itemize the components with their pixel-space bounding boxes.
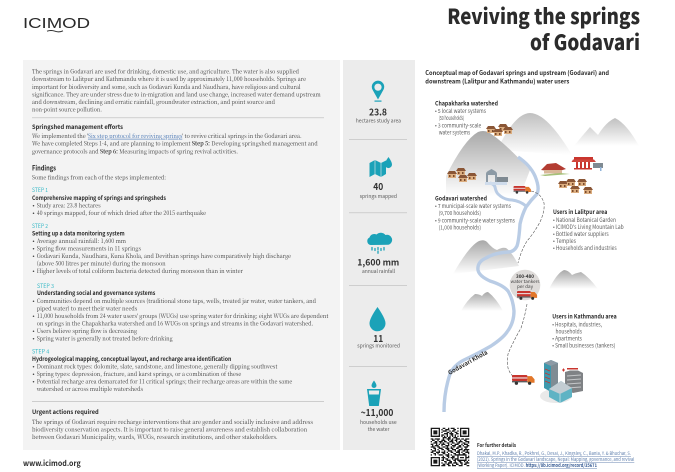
section: urgent actions required: between Godavari Municipality, wards, WUGs, research institutions, and other stakeholders. — [32, 432, 278, 441]
section: springshed management efforts: Springshed management efforts — [32, 122, 123, 131]
step 3: STEP 3 — [37, 282, 54, 290]
stat: households: the water — [368, 426, 390, 433]
QR code — [431, 428, 469, 466]
stat: springs mapped: springs mapped — [360, 193, 397, 200]
section: findings intro: Findings — [32, 164, 56, 174]
section: findings intro: Some findings from each of the steps implemented: — [32, 172, 166, 182]
map heading: downstream (Lalitpur and Kathmandu) water users — [425, 76, 569, 86]
step 3: Users believe spring flow is decreasing — [37, 326, 138, 335]
stat: households: households use — [360, 419, 397, 426]
step 3: Spring water is generally not treated before drinking — [37, 334, 173, 342]
step 1: Study area: 23.8 hectares — [37, 200, 101, 210]
text block: users in Lalitpur area: • Bottled water suppliers — [553, 230, 609, 238]
step 4: STEP 4 — [32, 348, 49, 356]
step 4: watershed or across multiple watersheds — [36, 384, 143, 393]
stat: springs mapped — [360, 179, 397, 200]
step 2: • — [32, 254, 35, 260]
stat: springs monitored: springs monitored — [357, 343, 400, 350]
text block: Chapakharka watershed: (50 households) — [439, 114, 464, 122]
step 1: 40 springs mapped, four of which dried after the 2015 earthquake — [37, 208, 206, 217]
stat: springs monitored: 11 — [373, 331, 383, 345]
mountains: middle range — [453, 240, 598, 311]
further details and citation: For further details — [477, 442, 516, 449]
step 4: Spring types: depression, fracture, and karst springs, or a combination of these — [37, 369, 241, 378]
text block: users in Lalitpur area — [553, 207, 624, 252]
step 1: • — [32, 204, 35, 210]
section: urgent actions required: Urgent actions required — [32, 407, 99, 416]
text block: users in Kathmandu area: households — [556, 328, 582, 336]
icon: tanker truck lower — [512, 375, 535, 385]
step 4: • — [32, 372, 35, 378]
text block: Godavari watershed: • 9 community-scale water systems — [435, 216, 515, 224]
step 2: STEP 2 — [32, 222, 48, 230]
step 4: • — [32, 364, 35, 370]
step 2: Higher levels of total coliform bacteria detected during monsoon than in winter — [37, 266, 243, 275]
step 2 — [32, 222, 291, 275]
stat: annual rainfall: annual rainfall — [362, 268, 395, 275]
step 1 — [32, 186, 206, 217]
section: findings intro — [32, 164, 166, 182]
text block: users in Lalitpur area: • National Botanical Garden — [553, 216, 616, 224]
step 2: • — [32, 239, 35, 245]
icon: water drop — [370, 307, 386, 331]
text block: users in Lalitpur area: • Households and industries — [553, 244, 617, 252]
text block: users in Lalitpur area: • ICIMOD's Living Mountain Lab — [553, 223, 624, 231]
step 2: (above 500 litres per minute) during the monsoon — [37, 258, 166, 268]
text block: Godavari watershed: • 7 municipal-scale water systems — [435, 202, 511, 210]
callout: water tankers per day — [510, 270, 540, 300]
section: urgent actions required — [32, 407, 313, 441]
title: of Godavari — [530, 27, 640, 57]
section: springshed management efforts: We have completed Steps 1-4, and are planning to implement Step 5: Developing springshed management and — [32, 139, 318, 148]
icon: map with drop — [370, 157, 392, 177]
icon: red roof building — [540, 163, 570, 176]
dashed tanker route — [508, 191, 544, 376]
text block: Godavari watershed — [435, 194, 515, 231]
further details and citation: Dhakal, M.P., Khadka, R., Pokhrel, G., Desai, J., Kingsley, C., Bania, Y. & Bhuchar, S. — [477, 450, 631, 457]
step 3: • — [32, 336, 35, 342]
title — [447, 1, 640, 57]
step 2: Godavari Kunda, Naudhara, Kuna Khola, and Devithan springs have comparatively high discharge — [37, 251, 291, 260]
callout: water tankers per day: water tankers — [510, 278, 540, 285]
text block: Chapakharka watershed — [435, 98, 498, 136]
step 4: • — [32, 380, 35, 386]
stat: annual rainfall: 1,600 mm — [357, 256, 399, 268]
stat: study area: hectares study area — [356, 118, 401, 124]
logo: ICIMOD: ICIMOD — [23, 15, 90, 32]
step 2: • — [32, 269, 35, 275]
text block: users in Lalitpur area: Users in Lalitpur area — [553, 207, 608, 216]
icon: red temple — [572, 157, 603, 171]
section: springshed management efforts: governance protocols and Step 6: Measuring impacts of spring revival activities. — [32, 146, 238, 155]
icon: houses upper hill — [486, 124, 513, 136]
step 3: 11,000 households from 24 water users' groups (WUGs) use spring water for drinking; eight WUGs are dependent — [37, 311, 329, 320]
icon: houses right cluster — [558, 179, 593, 194]
callout: water tankers per day: per day — [517, 283, 534, 290]
stat: springs monitored — [357, 331, 400, 350]
step 3 — [32, 282, 329, 342]
step 3: Understanding social and governance systems — [37, 288, 155, 297]
section: springshed management efforts — [32, 122, 318, 155]
text block: users in Kathmandu area: Users in Kathmandu area — [552, 312, 617, 320]
panel: narrative text — [23, 60, 340, 450]
step 4: Potential recharge area demarcated for 11 critical springs; their recharge areas are within the same — [37, 376, 292, 386]
step 4 — [32, 348, 292, 393]
icon: houses left cluster — [447, 168, 477, 182]
text block: introduction: significance. They are under stress due to in-migration and land use change, increased water demand upstream — [32, 90, 321, 98]
text block: Chapakharka watershed: • 5 local water systems — [435, 107, 486, 115]
text block: Chapakharka watershed: • 3 community-scale — [435, 121, 481, 129]
step 1: STEP 1 — [32, 186, 48, 194]
step 2: Average annual rainfall: 1,600 mm — [37, 236, 126, 245]
text block: Godavari watershed: Godavari watershed — [435, 194, 487, 202]
step 3: piped water) to meet their water needs — [37, 304, 138, 312]
icon: glass of water — [367, 380, 381, 406]
mountains: upper range — [446, 113, 639, 196]
step 3: Communities depend on multiple sources (traditional stone taps, wells, treated jar water, water tankers, and — [37, 296, 316, 305]
text block: introduction — [32, 66, 321, 114]
icon: rain cloud — [367, 233, 392, 253]
section: urgent actions required: The springs of Godavari require recharge interventions that are gender and socially inclusive and address — [32, 417, 313, 426]
further details and citation — [477, 442, 635, 469]
stat: springs mapped: 40 — [373, 179, 384, 193]
icon: location pin — [372, 81, 384, 102]
text block: introduction: The springs in Godavari are used for drinking, domestic use, and agriculture. The water is also supplied — [32, 66, 299, 76]
map heading — [425, 68, 609, 86]
text block: introduction: downstream to Lalitpur and Kathmandu where it is used by approximately 11,000 households. Springs are — [32, 74, 306, 83]
text block: users in Lalitpur area: • Temples — [553, 237, 576, 245]
further details and citation: (Working Paper). ICIMOD. https://lib.icimod.org/record/35671 — [477, 462, 597, 469]
icon: stone temple and tap — [485, 169, 508, 185]
step 2: Setting up a data monitoring system — [32, 228, 125, 238]
step 1: • — [32, 211, 35, 217]
text block: users in Kathmandu area: • Apartments — [552, 334, 582, 342]
text block: introduction: non-point source pollution. — [32, 104, 102, 114]
title: Reviving the springs — [447, 1, 640, 31]
step 4: Dominant rock types: dolomite, slate, sandstone, and limestone, generally dipping southwest — [37, 362, 278, 370]
map heading: Conceptual map of Godavari springs and upstream (Godavari) and — [425, 68, 609, 77]
stat: annual rainfall — [357, 256, 399, 275]
stat: study area: 23.8 — [369, 104, 387, 118]
text block: Godavari watershed: (9,700 households) — [439, 209, 481, 217]
text block: users in Kathmandu area: • Hospitals, industries, — [552, 320, 602, 328]
step 2: • — [32, 246, 35, 252]
step 3: • — [32, 314, 35, 320]
text block: introduction: and downstream, declining and erratic rainfall, groundwater extraction, and point source and — [32, 97, 275, 106]
text block: introduction: important for biodiversity and some, such as Godavari Kunda and Naudhara, have religious and cultural — [32, 82, 301, 91]
icon: tanker truck upper — [514, 186, 531, 194]
section: springshed management efforts: We implemented the 'Six step protocol for reviving springs' to revive critical springs in the Godavari area. — [32, 131, 302, 140]
callout: water tankers per day: 300-480 — [516, 274, 534, 280]
text block: Godavari watershed: (1,000 households) — [439, 223, 481, 231]
step 2: Spring flow measurements in 11 springs — [37, 244, 141, 252]
text block: Chapakharka watershed: Chapakharka watershed — [435, 98, 498, 107]
further details and citation: (2021). Springs in the Godavari landscape, Nepal: Mapping, governance, and revival — [477, 456, 635, 463]
step 3: • — [32, 299, 35, 305]
text block: users in Kathmandu area — [552, 312, 617, 349]
text block: users in Kathmandu area: • Small businesses (tankers) — [552, 341, 615, 349]
stat: study area — [356, 104, 401, 124]
website url: www.icimod.org — [23, 458, 81, 469]
panel: key statistics — [343, 60, 415, 450]
icon: tanker truck in callout — [517, 291, 537, 300]
text block: Chapakharka watershed: water systems — [439, 128, 471, 136]
stat: households: ~11,000 — [361, 405, 394, 419]
step 3: on springs in the Chapakharka watershed and 16 WUGs on springs and streams in the Godavari watershed. — [37, 318, 313, 328]
section: urgent actions required: biodiversity conservation aspects. It is important to raise general awareness and establish collaboration — [32, 424, 307, 434]
step 1: Comprehensive mapping of springs and springsheds — [32, 193, 166, 202]
step 3: • — [32, 329, 35, 335]
icon: city buildings — [540, 360, 583, 403]
stat: households — [360, 405, 397, 433]
step 4: Hydrogeological mapping, conceptual layout, and recharge area identification — [32, 354, 232, 363]
river label: Godavari Khola — [446, 347, 489, 377]
conceptual map — [444, 113, 639, 412]
river: Godavari Khola — [444, 157, 538, 412]
